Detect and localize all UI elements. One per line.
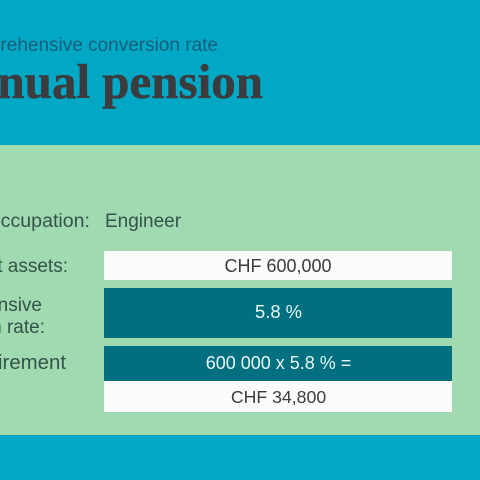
annual pension row: 600 000 x 5.8 % = <box>206 353 351 373</box>
conversion rate row: 5.8 % <box>255 301 302 322</box>
header text <box>0 35 263 109</box>
annual pension row: CHF 34,800 <box>231 387 326 407</box>
occupation row <box>0 210 182 232</box>
conversion rate row <box>0 288 452 338</box>
retirement assets row: CHF 600,000 <box>224 256 332 276</box>
annual pension row <box>0 346 452 412</box>
panel: calculation <box>0 145 480 435</box>
occupation row: Engineer <box>105 211 182 232</box>
retirement assets row <box>0 251 452 280</box>
